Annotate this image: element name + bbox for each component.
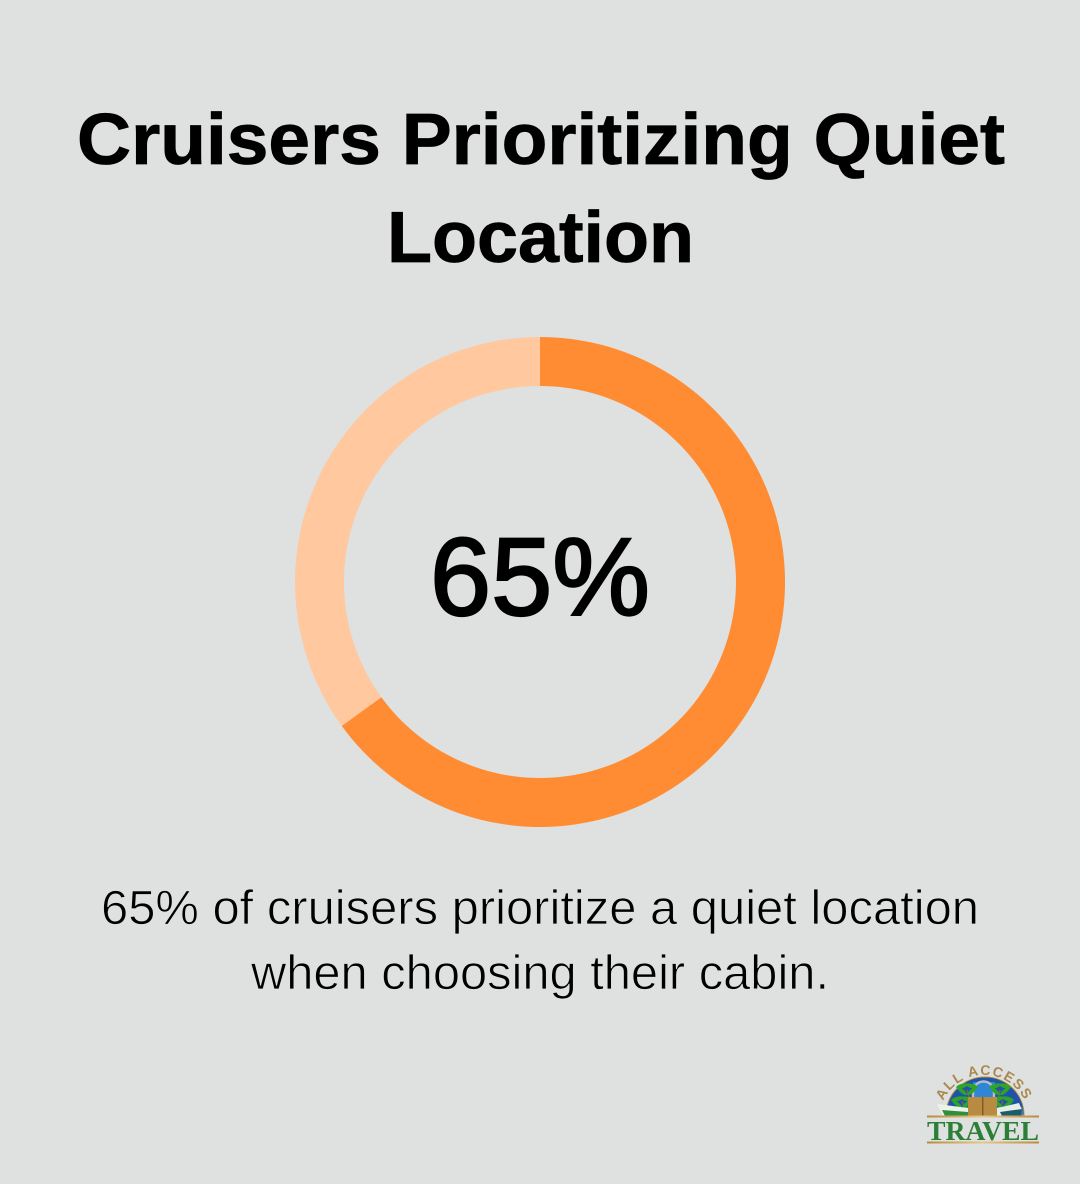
logo padlock body [968,1097,997,1116]
donut chart: 65 percent [295,337,785,827]
title: Location [387,198,694,278]
logo: All Access Travel [927,1065,1039,1146]
logo palm trunks [962,1090,1003,1112]
logo dome [946,1077,1024,1115]
logo right boat [997,1103,1022,1116]
logo top rule [927,1116,1039,1118]
title: Cruisers Prioritizing Quiet [77,100,1005,180]
logo wordmark: TRAVEL [927,1116,1039,1146]
logo: All Access Travel: ALL ACCESS [936,1065,1032,1100]
logo arc lettering [942,1075,1026,1105]
logo bottom rule [927,1142,1039,1144]
description text: 65% of cruisers prioritize a quiet location [101,882,979,935]
donut remainder segment: 35 percent [295,337,540,726]
logo sky highlight [962,1082,1023,1115]
description text: when choosing their cabin. [250,947,829,1000]
title [77,100,1005,278]
donut value segment: 65 percent [342,337,785,827]
logo padlock shackle [973,1082,994,1098]
description text [101,882,979,1000]
infographic canvas [80,111,1039,1144]
logo palm trees [951,1082,1014,1109]
logo right boat hull [1000,1109,1022,1116]
logo padlock seam [982,1097,983,1116]
logo left boat stripe [942,1110,968,1116]
logo left boat [937,1104,968,1116]
donut center value: 65% [430,516,650,639]
